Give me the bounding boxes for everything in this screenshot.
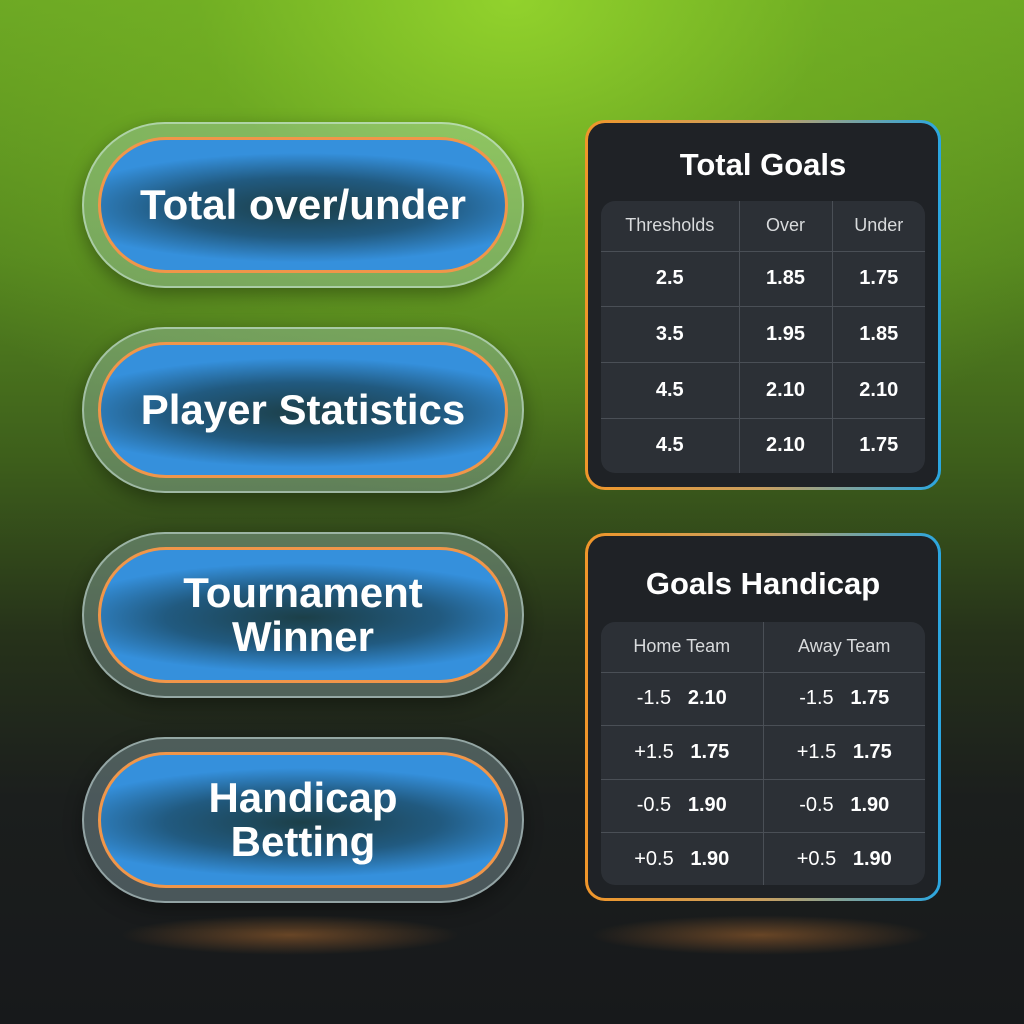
- table: handicap odds: -1.5 2.10: [637, 687, 727, 709]
- panel: Goals Handicap: [585, 533, 941, 901]
- table: total goals odds: 4.5: [656, 379, 684, 401]
- pill: Tournament Winner: [82, 532, 524, 698]
- table: total goals odds: 1.95: [766, 323, 805, 345]
- heading: Total Goals: Total Goals: [680, 147, 846, 182]
- table: total goals odds: 2.10: [859, 379, 898, 401]
- pill: Handicap Betting: [82, 737, 524, 903]
- table: handicap odds: -1.5 1.75: [799, 687, 889, 709]
- table: total goals odds: 2.10: [766, 379, 805, 401]
- heading: Goals Handicap: Goals Handicap: [646, 566, 880, 601]
- table: total goals odds: 2.5: [656, 267, 684, 289]
- table: total goals odds: [601, 201, 925, 473]
- table: total goals odds: 1.85: [859, 323, 898, 345]
- table: total goals odds: 1.75: [859, 267, 898, 289]
- pill: Handicap Betting: Handicap: [208, 774, 398, 821]
- table: handicap odds: [601, 622, 925, 885]
- table: handicap odds: Home Team: [633, 636, 730, 656]
- table: total goals odds: Over: [766, 215, 805, 235]
- table: total goals odds: 1.85: [766, 267, 805, 289]
- table: handicap odds: -0.5 1.90: [799, 794, 889, 816]
- table: handicap odds: Away Team: [798, 636, 890, 656]
- table: total goals odds: Under: [854, 215, 903, 235]
- table: total goals odds: Thresholds: [625, 215, 714, 235]
- table: total goals odds: 2.10: [766, 434, 805, 456]
- table: total goals odds: 4.5: [656, 434, 684, 456]
- table: total goals odds: 1.75: [859, 434, 898, 456]
- panel: Total Goals: [585, 120, 941, 490]
- pill: Player Statistics: [82, 327, 524, 493]
- pill: Handicap Betting: Betting: [231, 818, 375, 865]
- pill: Player Statistics: Player Statistics: [141, 386, 465, 433]
- table: handicap odds: +0.5 1.90: [797, 848, 892, 870]
- pill: Tournament Winner: Winner: [232, 613, 374, 660]
- pill: Total over/under: Total over/under: [140, 181, 466, 228]
- pill: Tournament Winner: Tournament: [183, 569, 423, 616]
- table: handicap odds: +0.5 1.90: [634, 848, 729, 870]
- table: total goals odds: 3.5: [656, 323, 684, 345]
- table: handicap odds: +1.5 1.75: [634, 741, 729, 763]
- pill: Total over/under: [82, 122, 524, 288]
- table: handicap odds: -0.5 1.90: [637, 794, 727, 816]
- table: handicap odds: +1.5 1.75: [797, 741, 892, 763]
